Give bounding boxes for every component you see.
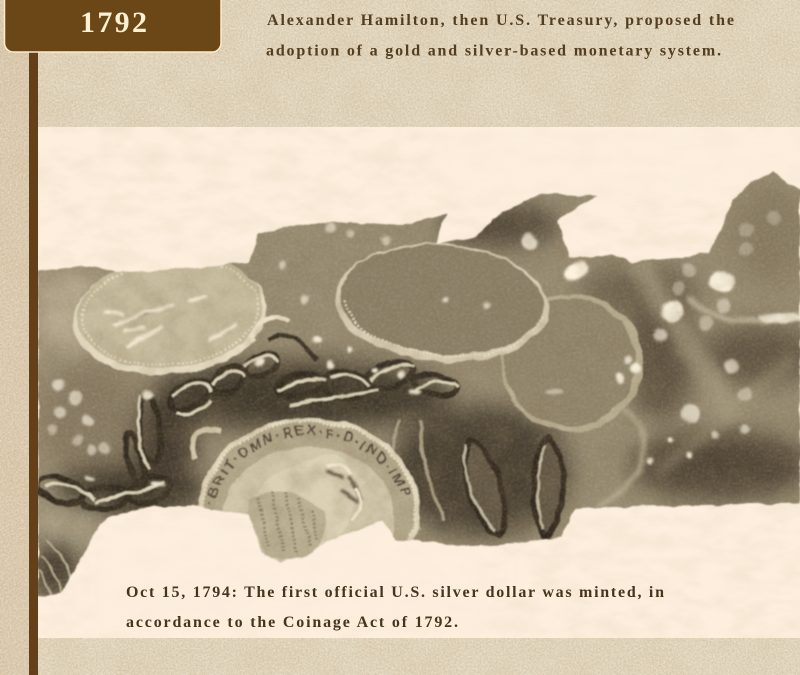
coin photo: [38, 170, 800, 598]
intro text: Hamilton proposal: adoption of a gold and silver-based monetary system.: [266, 42, 721, 60]
highlight bokeh: [47, 211, 800, 488]
intro text: Hamilton proposal: [266, 12, 734, 60]
coin legend: G·BRIT·OMN·REX·F·D·IND·IMP: [206, 424, 412, 510]
caption text: first silver dollar: Oct 15, 1794: The first official U.S. silver dollar was minted, in: [126, 584, 664, 601]
coin 1 top left: [72, 262, 268, 376]
timeline vertical bar: [29, 52, 38, 675]
caption text: first silver dollar: accordance to the Coinage Act of 1792.: [126, 614, 458, 631]
year badge: [4, 0, 221, 52]
coin 2 top centre: [331, 237, 553, 369]
intro text: Hamilton proposal: Alexander Hamilton, then U.S. Treasury, proposed the: [267, 12, 734, 29]
coin 4 portrait coin: [198, 416, 421, 563]
paper texture: [38, 127, 800, 638]
caption text: first silver dollar: [126, 584, 664, 631]
year label: 1792: [80, 6, 147, 39]
torn paper base: [38, 127, 800, 638]
photo mottling: [40, 221, 796, 582]
diagonal ring bands, right: [600, 265, 800, 505]
photo panel: gold coins and chains emerging from torn paper: [38, 127, 800, 638]
chains: [34, 317, 563, 597]
shadow and light areas: [33, 185, 800, 598]
coin 3 back right: [501, 294, 643, 432]
